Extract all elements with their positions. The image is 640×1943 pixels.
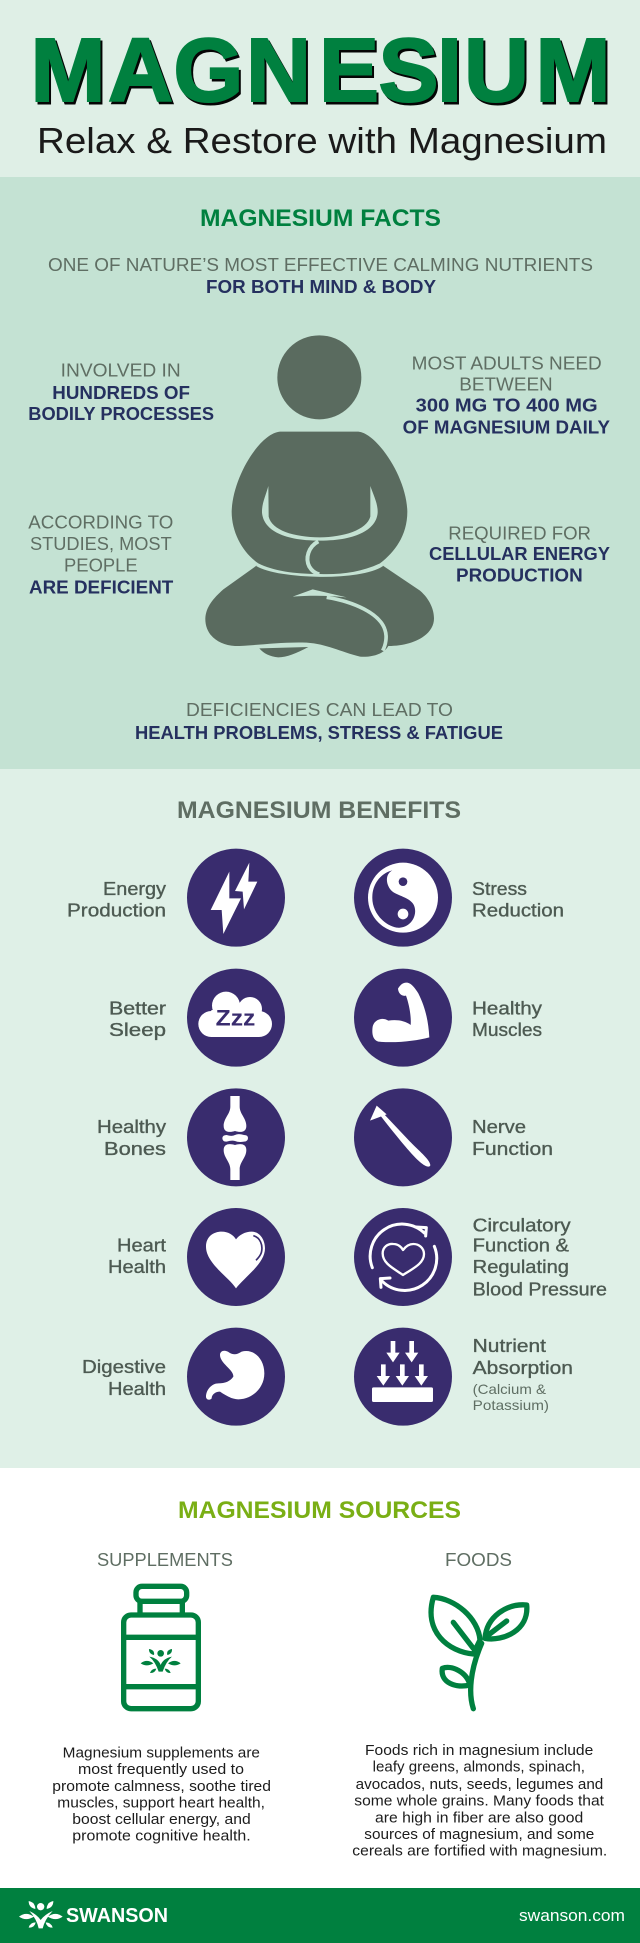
text: foods description: cereals are fortified with magnesium. [352,1844,607,1860]
fact: cellular energy [429,522,610,586]
icon: supplement bottle [124,1586,198,1709]
text: supplements description: Magnesium supplements are [63,1745,260,1761]
benefit: circulatory function: Regulating [473,1256,569,1277]
benefit: energy production [67,849,285,947]
benefit: nutrient absorption: (Calcium & [473,1381,547,1397]
benefit: better sleep: Better [109,998,166,1018]
title shadow and title: MAGNESIUM: MAGNESIUM [30,21,610,121]
fact: deficient: ARE DEFICIENT [29,577,173,597]
benefit: circulatory function [354,1208,607,1306]
benefit: circulatory function: Circulatory [473,1215,572,1236]
text: foods description: some whole grains. Many foods that [354,1794,604,1810]
text: supplements description: most frequently used to [78,1762,244,1778]
panel: magnesium benefits [0,769,640,1468]
benefit: nutrient absorption: Absorption [473,1357,573,1378]
fact: cellular energy: PRODUCTION [456,566,583,586]
text: supplements description: muscles, support heart health, [57,1796,265,1812]
fact: bodily processes: INVOLVED IN [61,360,181,381]
panel: header [0,0,640,177]
benefit: heart health [108,1208,285,1306]
benefit: healthy bones: Bones [104,1138,166,1159]
subtitle: Relax & Restore with Magnesium [37,120,607,161]
logo wordmark: SWANSON [66,1905,168,1927]
sources heading: MAGNESIUM SOURCES [178,1497,461,1524]
benefits heading: MAGNESIUM BENEFITS [177,797,461,824]
benefit: nutrient absorption: Nutrient [473,1335,546,1356]
benefit: healthy bones [97,1088,285,1186]
text: supplements description: promote calmness, soothe tired [52,1779,271,1795]
benefit: stress reduction: Reduction [472,900,564,920]
fact: deficiencies [135,699,503,743]
benefit: circulatory function: Blood Pressure [473,1279,607,1300]
panel: magnesium sources [0,1468,640,1888]
icon: swanson logo mark [19,1901,63,1928]
fact: cellular energy: CELLULAR ENERGY [429,544,610,564]
fact: deficiencies: DEFICIENCIES CAN LEAD TO [186,699,453,720]
text: foods description: sources of magnesium, and some [364,1827,594,1843]
fact: daily need: MOST ADULTS NEED [412,352,602,373]
fact: cellular energy: REQUIRED FOR [448,522,591,543]
benefit: better sleep: Zzz [216,1006,255,1031]
text: foods description: avocados, nuts, seeds, legumes and [356,1777,603,1793]
facts heading: MAGNESIUM FACTS [200,205,441,232]
benefit: healthy muscles: Healthy [472,998,543,1018]
text: foods description: Foods rich in magnesium include [365,1743,593,1759]
fact: bodily processes: HUNDREDS OF [52,383,190,403]
title shadow and title: MAGNESIUM: MAGNESIUM [32,24,612,124]
benefit: better sleep: Sleep [109,1019,166,1040]
text: supplements description: promote cognitive health. [72,1829,251,1845]
fact: daily need: OF MAGNESIUM DAILY [403,417,610,437]
fact: calming nutrients [48,254,593,297]
text: foods description: are high in fiber are also good [375,1810,583,1826]
benefit: healthy bones: Healthy [97,1116,167,1137]
supplements heading: SUPPLEMENTS [97,1549,233,1570]
benefit: energy production: Production [67,900,166,920]
fact: deficient: ACCORDING TO [28,511,173,532]
text: supplements description [52,1745,271,1845]
benefit: nutrient absorption: Potassium) [473,1397,549,1413]
benefit: better sleep [109,969,285,1067]
foods heading: FOODS [445,1549,512,1570]
website: swanson.com [519,1906,625,1925]
fact: deficiencies: HEALTH PROBLEMS, STRESS & FATIGUE [135,723,503,743]
fact: daily need: BETWEEN [459,374,553,395]
icon: plant [431,1597,527,1709]
fact: bodily processes: BODILY PROCESSES [28,404,214,424]
benefit: nutrient absorption [354,1328,573,1426]
benefit: digestive health [82,1328,285,1426]
fact: daily need [403,352,610,437]
benefit: stress reduction: Stress [472,878,527,899]
text: supplements description: boost cellular energy, and [72,1812,251,1828]
fact: bodily processes [28,360,214,424]
benefit: healthy muscles: Muscles [472,1019,542,1040]
benefit: nerve function: Nerve [472,1116,526,1137]
fact: daily need: 300 MG TO 400 MG [416,396,598,416]
benefit: healthy muscles [354,969,543,1067]
benefit: energy production: Energy [103,878,167,899]
fact: calming nutrients: ONE OF NATURE’S MOST EFFECTIVE CALMING NUTRIENTS [48,254,593,275]
text: foods description [352,1743,607,1860]
meditating figure [205,335,434,657]
fact: deficient: PEOPLE [64,555,138,576]
benefit: digestive health: Digestive [82,1356,166,1377]
benefit: heart health: Heart [117,1234,166,1256]
fact: deficient: STUDIES, MOST [30,533,172,554]
fact: calming nutrients: FOR BOTH MIND & BODY [206,277,436,297]
panel: magnesium facts [0,177,640,769]
benefit: nerve function [354,1088,553,1186]
benefit: digestive health: Health [108,1378,166,1399]
benefit: circulatory function: Function & [473,1235,570,1256]
panel: footer [0,1888,640,1943]
benefit: nerve function: Function [472,1138,553,1159]
text: foods description: leafy greens, almonds, spinach, [373,1760,585,1776]
benefit: stress reduction [354,849,564,947]
benefit: heart health: Health [108,1256,166,1277]
fact: deficient [28,511,173,597]
